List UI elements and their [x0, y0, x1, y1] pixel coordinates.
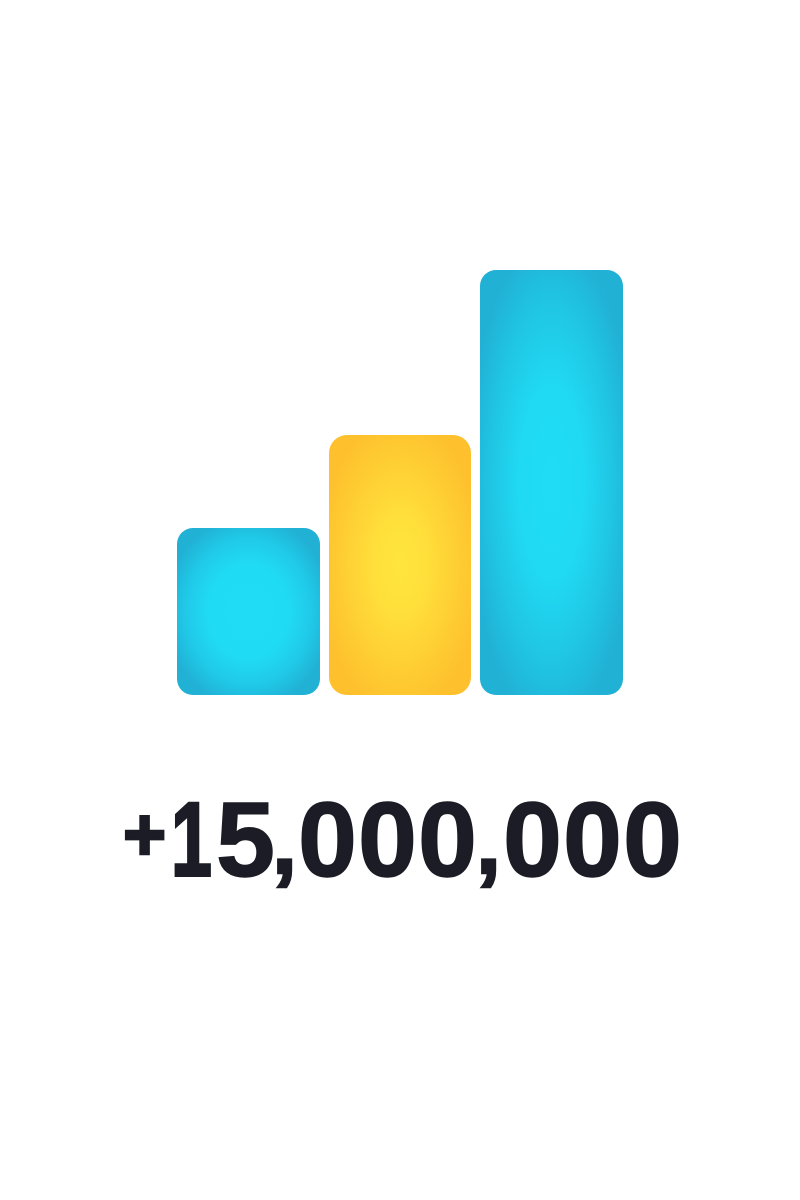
- headline number: ,: [272, 793, 297, 893]
- headline number: +: [123, 793, 166, 876]
- headline number: 000: [298, 781, 477, 899]
- bar: small blue: [177, 528, 320, 695]
- headline number: 000: [503, 781, 682, 899]
- bar: medium yellow: [329, 435, 471, 695]
- headline number: 1: [171, 782, 212, 899]
- headline number: 5: [216, 781, 275, 899]
- bar: tall blue: [480, 270, 623, 695]
- headline number: [123, 781, 682, 899]
- bar chart: [177, 270, 623, 695]
- headline number: ,: [476, 793, 501, 893]
